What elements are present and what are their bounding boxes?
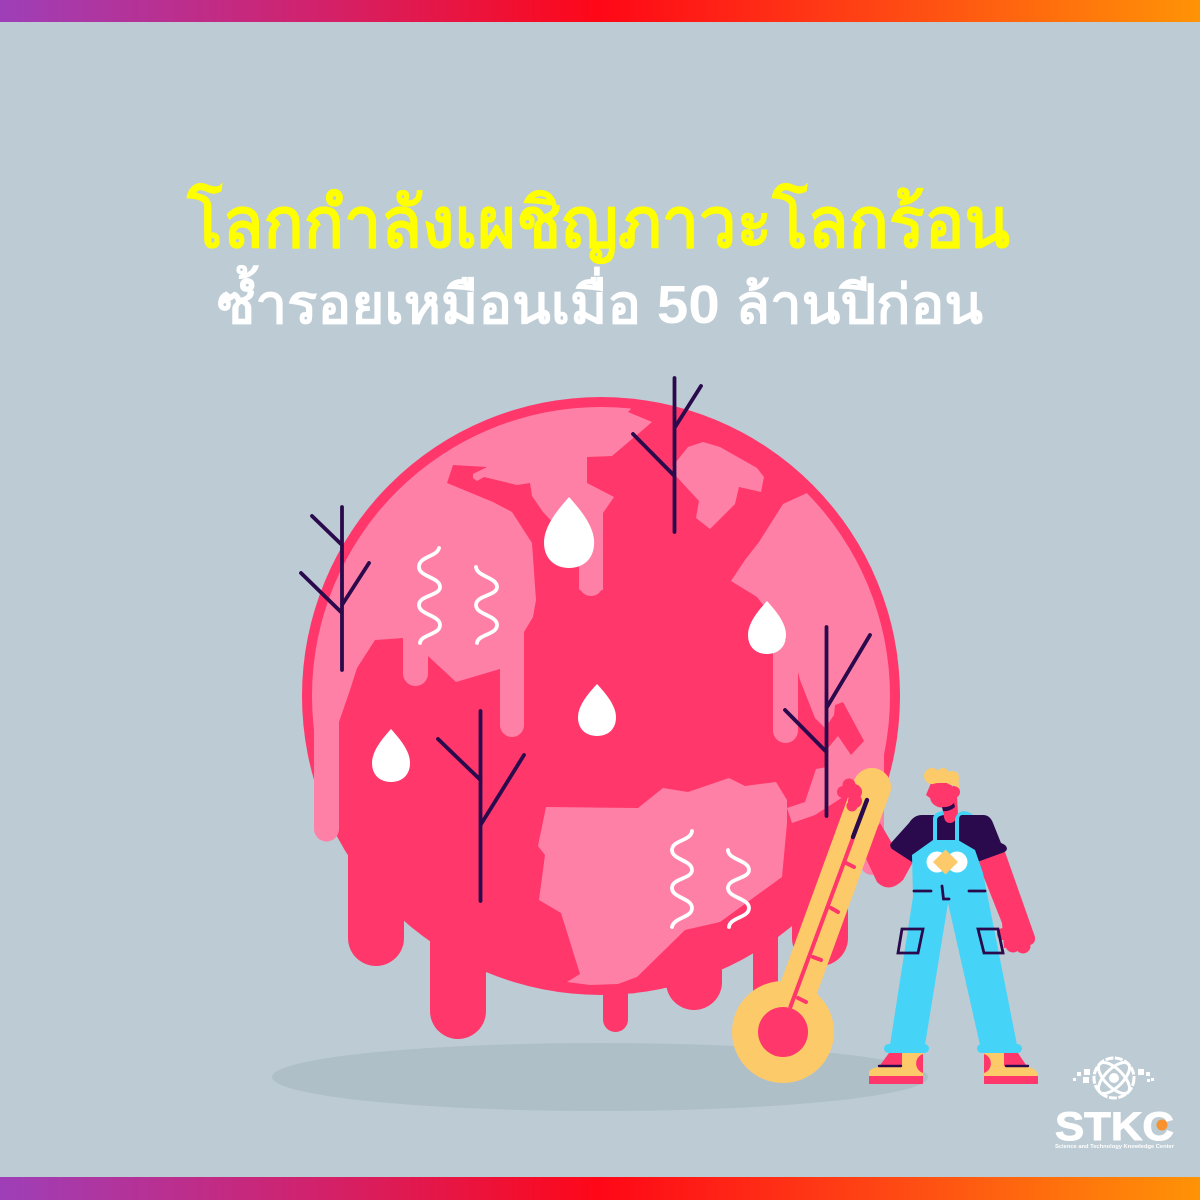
person arm behind thermometer [862,823,913,888]
globe ocean [312,407,890,985]
pockets and seams [898,886,1003,953]
thermometer [732,787,872,1083]
logo atom icon [1093,1057,1135,1099]
ground shadow [272,1043,928,1111]
left boot [869,1053,923,1084]
right boot [984,1053,1038,1084]
overalls [884,811,1022,1053]
heat waves left [419,548,497,643]
hair [924,768,959,788]
heat waves right [672,831,749,927]
neck [942,795,958,823]
bare trees [301,378,870,901]
globe drips and ring [302,397,900,1039]
light continents and drips [314,442,884,985]
dark landmass [339,404,885,992]
title: ซ้ำรอยเหมือนเมื่อ 50 ล้านปีก่อน [217,265,983,335]
title [186,182,1010,335]
logo orange dot [1156,1120,1168,1130]
STKC logo [1055,1057,1175,1150]
right arm [977,852,1035,954]
bottom gradient bar [0,1177,1200,1200]
logo wordmark: STKC [1055,1105,1174,1149]
shirt [890,815,1007,862]
logo pixel squares [1073,1069,1154,1083]
top gradient bar [0,0,1200,22]
smile [942,803,955,811]
overalls badge [926,850,968,874]
logo tagline: Science and Technology Knowledge Center [1055,1144,1175,1150]
melting globe [301,378,900,1039]
hand on thermometer [837,778,862,812]
person [869,768,1038,1084]
title: โลกกำลังเผชิญภาวะโลกร้อน [186,182,1010,265]
face [926,783,957,808]
water drops [372,497,786,782]
